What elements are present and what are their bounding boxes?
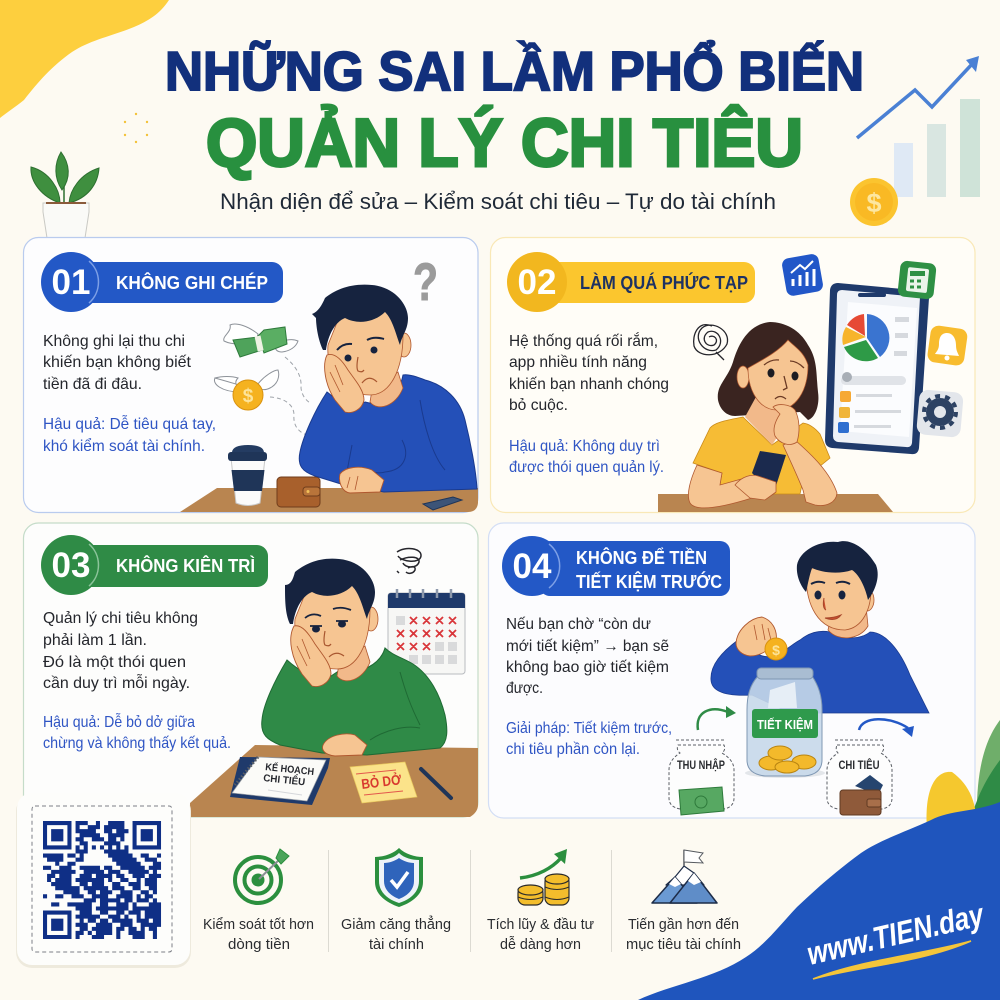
icon: mountain flag — [652, 850, 717, 903]
text: description 01: tiền đã đi đâu. — [43, 376, 142, 393]
icon: flying cash — [224, 324, 298, 357]
title: NHỮNG SAI LẦM PHỔ BIẾN — [165, 40, 864, 102]
icon: sticky note bỏ dở — [350, 762, 417, 803]
icon: coins and growth arrow — [518, 849, 569, 905]
panel: 01 không ghi chép — [24, 238, 478, 512]
icon: calendar — [388, 589, 465, 674]
person 04: $ — [772, 642, 780, 658]
badge 02: LÀM QUÁ PHỨC TẠP — [580, 272, 748, 293]
icon: spring scribble — [397, 549, 421, 573]
icon: gear app — [916, 389, 964, 438]
table 01 — [180, 488, 478, 512]
person 01 — [299, 285, 477, 493]
person 04 — [711, 541, 929, 713]
decorative leaves bottom right — [927, 720, 1000, 830]
badge 01 — [41, 252, 283, 312]
panel: QR code — [16, 793, 191, 968]
text: solution 04: Giải pháp: Tiết kiệm trước, — [506, 720, 672, 737]
benefit: giảm căng thẳng: Giảm căng thẳng — [341, 915, 451, 933]
table 02 — [658, 494, 893, 512]
text: consequence 01: khó kiểm soát tài chính. — [43, 437, 205, 455]
benefit: giảm căng thẳng: tài chính — [369, 937, 424, 953]
icon: target — [235, 849, 289, 903]
icon: flying coin: $ — [243, 386, 254, 407]
benefit: kiểm soát dòng tiền: dòng tiền — [228, 937, 290, 953]
yellow underline — [813, 941, 971, 979]
title — [165, 40, 864, 181]
badge 03: 03 — [52, 546, 90, 585]
icon: coffee cup — [228, 445, 267, 506]
decorative yellow blob top left — [0, 0, 169, 118]
text: description 03 — [43, 610, 198, 692]
text: consequence 03 — [43, 712, 231, 752]
text: description 04: Nếu bạn chờ “còn dư — [506, 616, 651, 633]
benefit: mục tiêu tài chính: Tiến gần hơn đến — [628, 917, 739, 933]
dashed jar chi tiêu — [827, 740, 892, 815]
dashed jar thu nhập — [669, 740, 734, 815]
benefit: kiểm soát dòng tiền: Kiểm soát tốt hơn — [203, 917, 314, 933]
icon: chart app — [781, 253, 824, 297]
badge 01: KHÔNG GHI CHÉP — [116, 272, 268, 293]
badge 03: KHÔNG KIÊN TRÌ — [116, 555, 255, 576]
text: description 04: không bao giờ tiết kiệm — [506, 659, 669, 676]
text: description 01: khiến bạn không biết — [43, 354, 192, 371]
icon: notebook kế hoạch chi tiêu — [230, 757, 330, 805]
text: description 02 — [509, 331, 669, 414]
text: description 04: mới tiết kiệm” → bạn sẽ — [506, 638, 669, 655]
text: description 03: phải làm 1 lần. — [43, 632, 147, 649]
icon: blue arrow — [859, 719, 914, 737]
person 03 — [262, 559, 447, 756]
QR pattern — [43, 821, 161, 939]
subtitle: Nhận diện để sửa – Kiểm soát chi tiêu – Tự do tài chính — [220, 189, 776, 214]
badge 02: 02 — [518, 263, 556, 302]
text: description 04: được. — [506, 680, 543, 697]
benefit: tích lũy đầu tư: Tích lũy & đầu tư — [487, 917, 594, 933]
person 02 — [688, 322, 837, 508]
text: consequence 02 — [509, 438, 664, 476]
text: description 02: khiến bạn nhanh chóng — [509, 376, 669, 393]
text: description 03: Đó là một thói quen — [43, 654, 186, 671]
panel: 02 làm quá phức tạp — [490, 238, 975, 512]
big phone app screen — [825, 283, 929, 454]
badge 04: TIẾT KIỆM TRƯỚC — [576, 571, 722, 592]
icon: savings jar tiết kiệm — [745, 668, 825, 778]
table 03 — [190, 745, 478, 817]
icon: flying coin — [214, 370, 279, 410]
icon: question mark: ? — [413, 253, 438, 312]
text: description 02: bỏ cuộc. — [509, 397, 568, 414]
badge 01: 01 — [52, 263, 90, 302]
icon: potted plant — [31, 152, 99, 238]
title: QUẢN LÝ CHI TIÊU — [206, 104, 803, 181]
icon: scribble — [694, 325, 728, 360]
badge 04: 04 — [513, 547, 552, 586]
text: description 04 — [506, 616, 669, 697]
text: description 01: Không ghi lại thu chi — [43, 333, 185, 350]
panel: 04 không để tiền tiết kiệm trước — [488, 523, 975, 818]
icon: sticky note bỏ dở: BỎ DỞ — [360, 770, 402, 792]
panel: 03 không kiên trì — [24, 523, 478, 817]
text: consequence 01 — [43, 414, 216, 455]
dashed money trails — [270, 357, 310, 435]
icon: growth chart and coin: $ — [866, 188, 882, 218]
badge 04: KHÔNG ĐỂ TIỀN — [576, 547, 707, 568]
text: description 02: app nhiều tính năng — [509, 354, 647, 371]
icon: pen — [421, 769, 451, 798]
badge 03 — [41, 535, 268, 595]
icon: phone on table — [423, 497, 462, 510]
benefit: tích lũy đầu tư — [487, 849, 594, 953]
dashed jar thu nhập: THU NHẬP — [677, 759, 725, 772]
text: consequence 03: Hậu quả: Dễ bỏ dở giữa — [43, 712, 195, 731]
text: description 03: Quản lý chi tiêu không — [43, 610, 198, 627]
text: solution 04: chi tiêu phần còn lại. — [506, 741, 640, 758]
icon: growth chart and coin — [850, 56, 980, 226]
text: description 03: cần duy trì mỗi ngày. — [43, 673, 190, 692]
icon: notebook kế hoạch chi tiêu: KẾ HOẠCH — [265, 760, 315, 778]
icon: green arrow — [698, 706, 736, 730]
text: consequence 02: Hậu quả: Không duy trì — [509, 438, 660, 455]
icon: bell app — [927, 325, 968, 366]
text: description 01 — [43, 333, 192, 393]
text: consequence 02: được thói quen quản lý. — [509, 459, 664, 476]
sparkles — [124, 113, 148, 143]
benefit: giảm căng thẳng — [341, 848, 451, 953]
text: description 02: Hệ thống quá rối rắm, — [509, 331, 658, 350]
text: consequence 03: chừng và không thấy kết quả. — [43, 735, 231, 752]
badge 02 — [507, 252, 755, 312]
icon: shield — [375, 848, 423, 907]
benefit: mục tiêu tài chính — [626, 850, 741, 953]
badge 04 — [502, 536, 730, 596]
decorative blue corner with website — [638, 802, 1000, 1000]
text: solution 04 — [506, 720, 672, 758]
dashed jar chi tiêu: CHI TIÊU — [838, 759, 880, 772]
icon: savings jar tiết kiệm: TIẾT KIỆM — [757, 717, 813, 732]
icon: wallet — [277, 477, 320, 507]
benefit: tích lũy đầu tư: dễ dàng hơn — [500, 936, 581, 953]
icon: calculator app — [897, 260, 937, 300]
benefit: mục tiêu tài chính: mục tiêu tài chính — [626, 937, 741, 953]
text: consequence 01: Hậu quả: Dễ tiêu quá tay, — [43, 414, 216, 433]
benefit: kiểm soát dòng tiền — [203, 849, 314, 953]
icon: notebook kế hoạch chi tiêu: CHI TIÊU — [263, 771, 306, 788]
